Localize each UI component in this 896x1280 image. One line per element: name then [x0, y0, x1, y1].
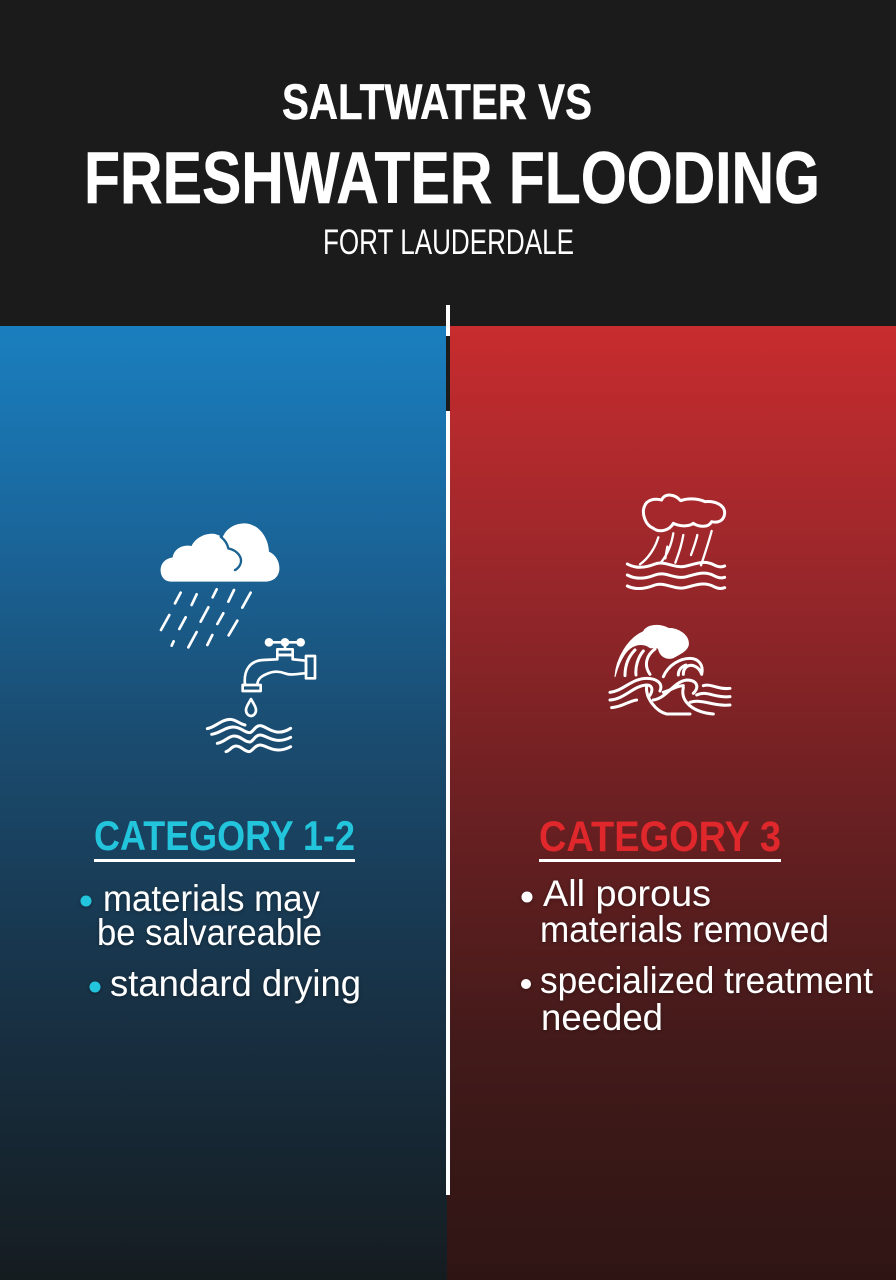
- title: [84, 74, 820, 219]
- text block: saltwater bullets: materials removed: [540, 909, 829, 950]
- header band: [0, 0, 896, 326]
- text block: freshwater bullets: be salvareable: [97, 912, 322, 953]
- text block: saltwater bullets: needed: [541, 997, 663, 1038]
- title: SALTWATER VS: [282, 74, 592, 130]
- heading: category 1-2: CATEGORY 1-2: [94, 812, 355, 859]
- text block: saltwater bullets: specialized treatment: [540, 960, 874, 1001]
- heading: category 3: CATEGORY 3: [539, 813, 781, 861]
- panel: freshwater: [0, 326, 447, 1280]
- icon: rain cloud: [161, 523, 279, 647]
- subtitle: FORT LAUDERDALE: [323, 223, 574, 262]
- icon: dripping faucet over water: [207, 639, 315, 752]
- panel: saltwater: [447, 326, 896, 1280]
- text block: freshwater bullets: standard drying: [110, 963, 361, 1004]
- text block: freshwater bullets: [80, 878, 361, 1004]
- icon: tidal wave: [610, 625, 730, 714]
- divider line: [446, 305, 450, 1195]
- text block: saltwater bullets: All porous: [543, 873, 711, 914]
- text block: saltwater bullets: [521, 873, 874, 1038]
- icon: storm over waves: [627, 495, 725, 589]
- text block: freshwater bullets: materials may: [103, 878, 320, 919]
